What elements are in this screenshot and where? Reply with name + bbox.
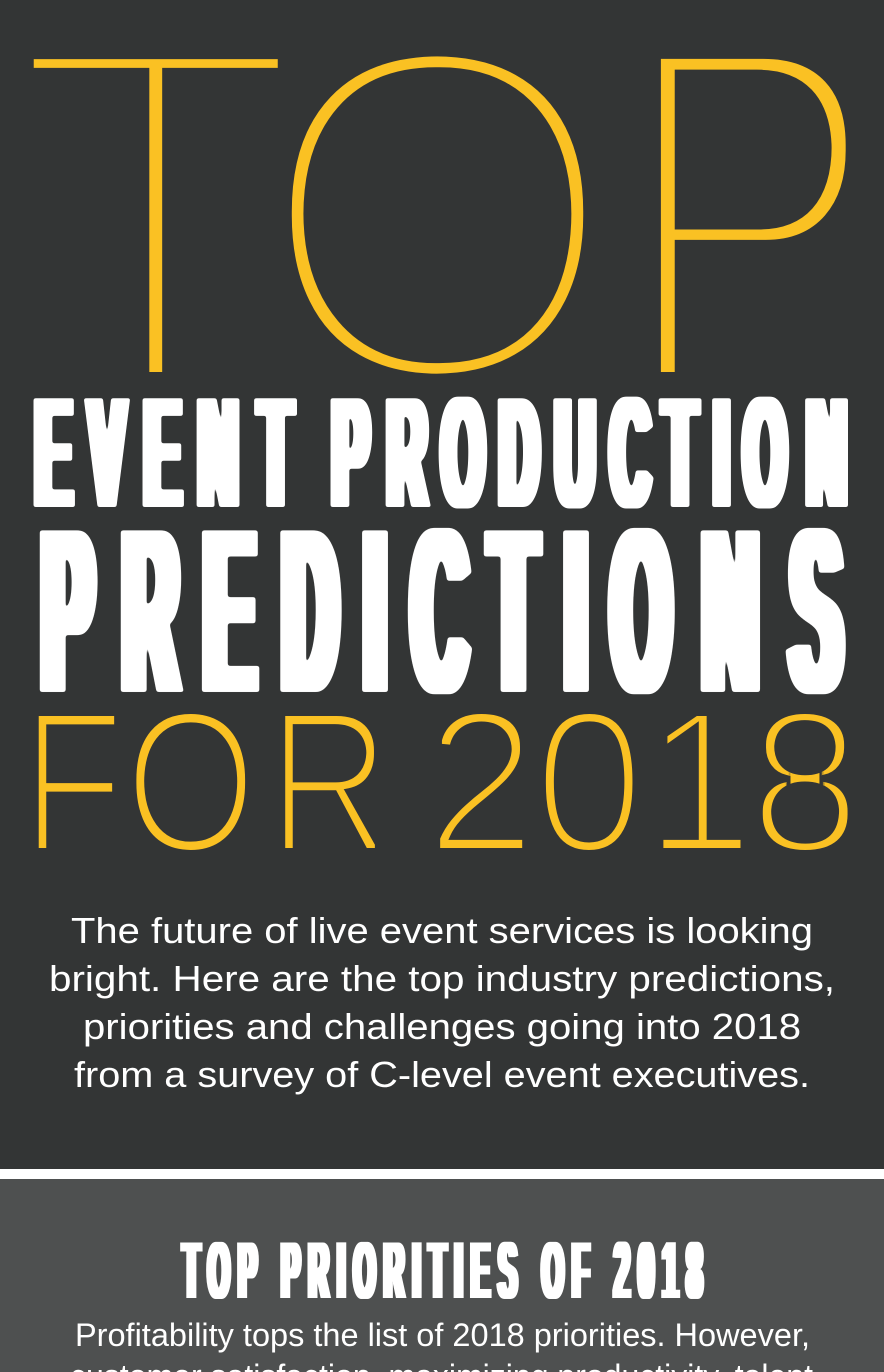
title: TOP: [6, 0, 877, 492]
intro text: [49, 910, 835, 1095]
heading: top priorities of 2018: TOP PRIORITIES OF 2018: [183, 1224, 702, 1315]
title: FOR 2018: FOR: [20, 668, 391, 895]
title: EVENT PRODUCTION: EVENT PRODUCTION: [35, 365, 846, 542]
priorities text: Profitability tops the list of 2018 priorities. However,: [75, 1317, 810, 1353]
intro text: bright. Here are the top industry predictions,: [49, 958, 835, 999]
intro text: from a survey of C-level event executives.: [74, 1054, 810, 1095]
intro text: priorities and challenges going into 2018: [83, 1006, 801, 1047]
panel: top priorities: [0, 1179, 884, 1372]
title: PREDICTIONS: PREDICTIONS: [42, 479, 841, 742]
title: FOR 2018: 2018: [425, 668, 861, 894]
intro text: The future of live event services is looking: [71, 910, 813, 951]
title: FOR 2018: [20, 668, 861, 895]
divider band: [0, 1169, 884, 1179]
priorities text: [70, 1317, 813, 1372]
